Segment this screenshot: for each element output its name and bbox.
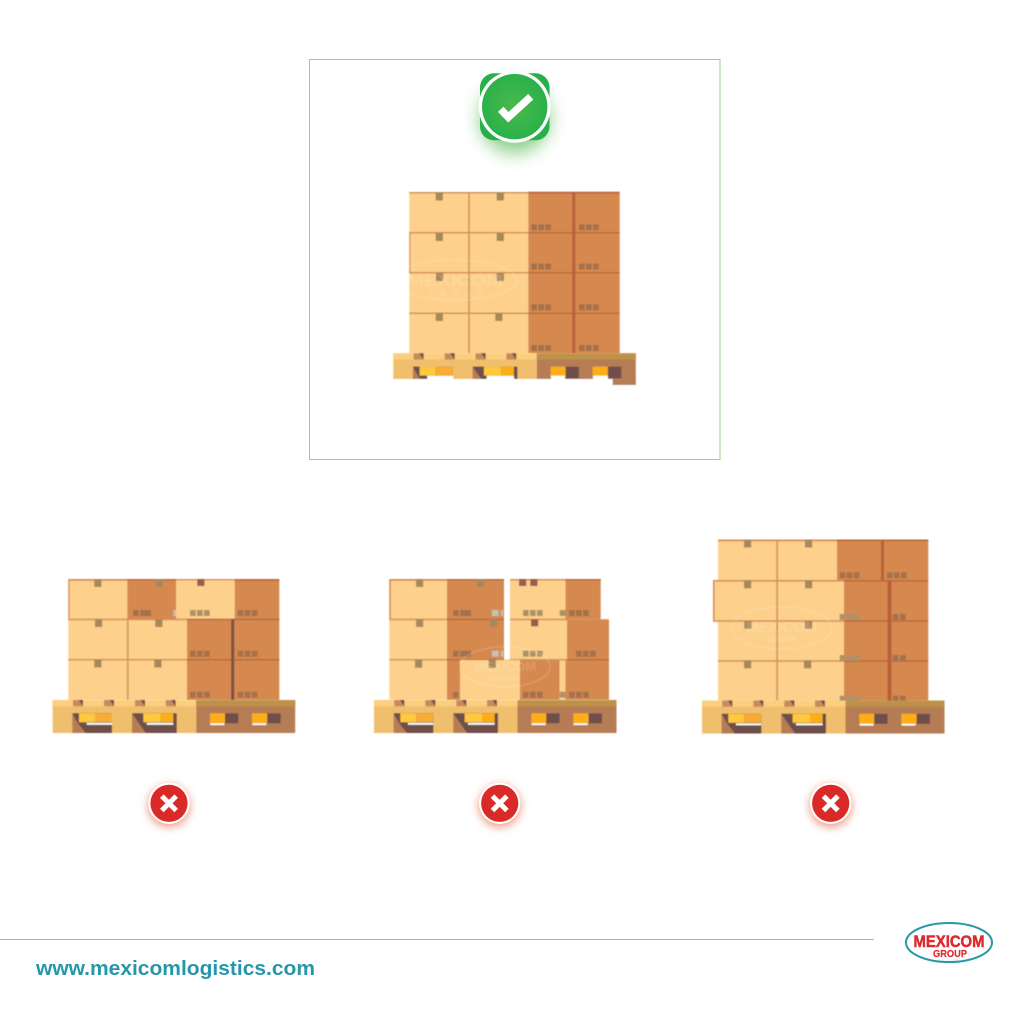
panel: correct stacking frame — [310, 60, 720, 460]
correct pallet base — [393, 353, 637, 387]
icon: red cross 1 — [148, 783, 190, 827]
wrong pallet 3: shifted layer and too tall — [713, 540, 928, 704]
website address: www.mexicomlogistics.com — [35, 957, 315, 980]
wrong pallet 2: gap and protruding box: MEXICOM — [474, 659, 536, 674]
logo: Mexicom Group — [906, 923, 992, 962]
wrong pallet 3: shifted layer and too tall: MEXICOM — [746, 619, 818, 636]
wrong pallet 1: misaligned top layer — [68, 579, 279, 700]
logo: Mexicom Group: MEXICOM — [914, 933, 984, 951]
icon: red cross 3 — [810, 783, 852, 827]
wrong pallet 1 base — [53, 700, 295, 733]
wrong pallet 2: gap and protruding box: GROUP — [490, 674, 520, 683]
icon: green check badge — [479, 71, 551, 153]
correct pallet: neat four-layer stack: GROUP — [428, 289, 482, 299]
wrong pallet 2: gap and protruding box — [389, 579, 609, 700]
correct pallet: neat four-layer stack: MEXICOM — [407, 271, 503, 290]
correct pallet: neat four-layer stack — [393, 192, 620, 354]
protruding front box — [460, 660, 520, 700]
wrong pallet 3 base — [702, 700, 944, 734]
footer rule — [0, 939, 874, 940]
icon: red cross 2 — [479, 783, 521, 827]
logo: Mexicom Group: GROUP — [933, 949, 967, 960]
wrong pallet 3: shifted layer and too tall: GROUP — [767, 635, 797, 644]
wrong pallet 2 base — [374, 700, 616, 733]
